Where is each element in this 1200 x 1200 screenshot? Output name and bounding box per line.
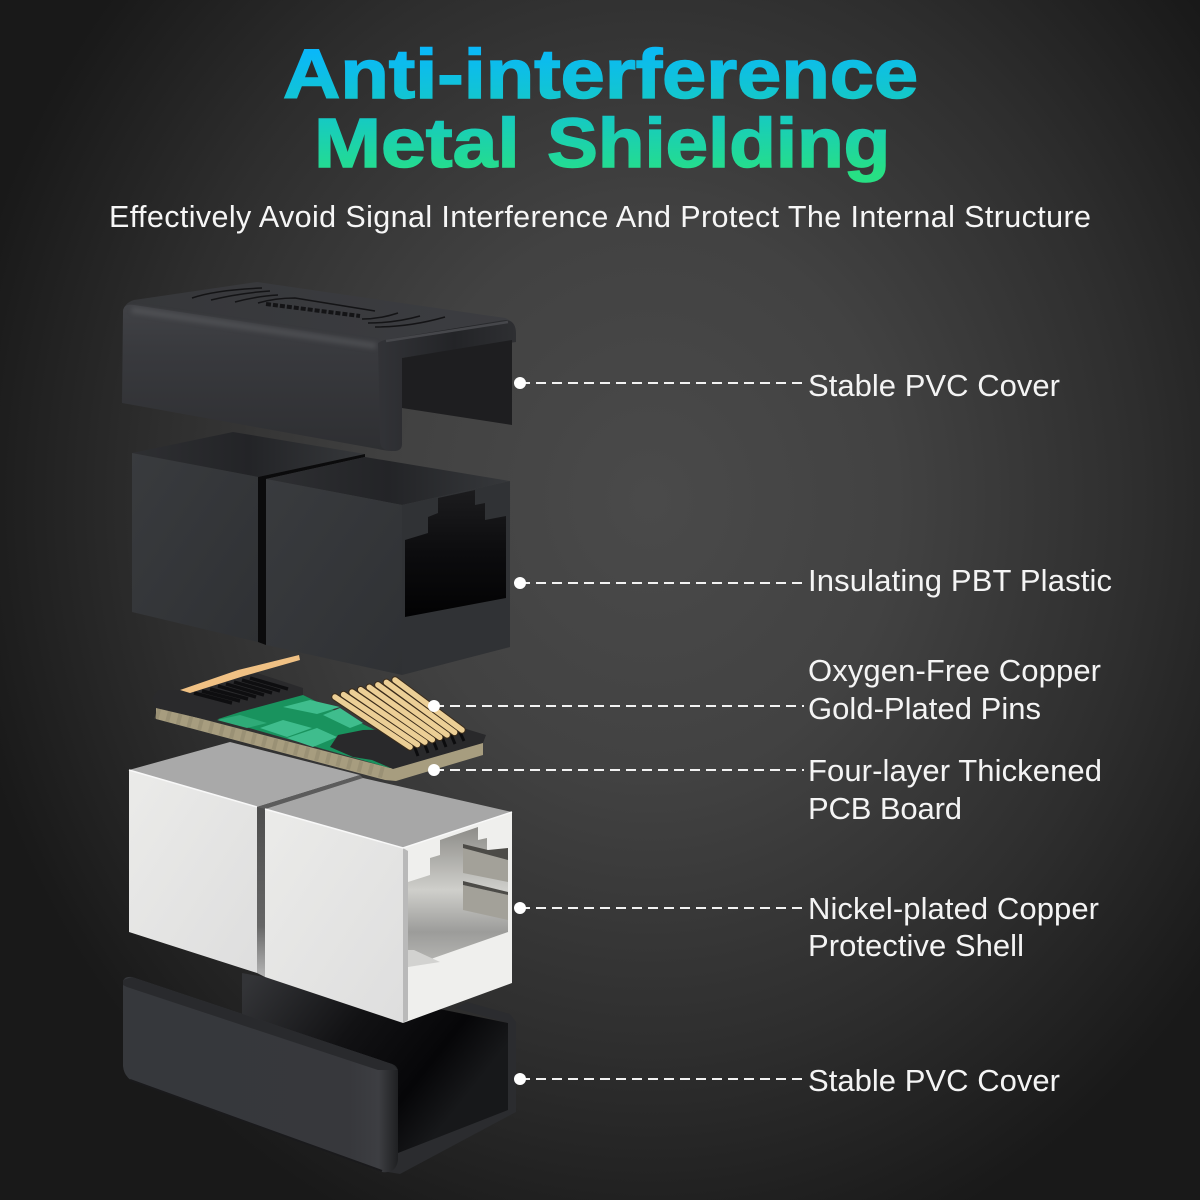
title: Anti-interference xyxy=(283,34,918,113)
callout: stable PVC cover (top): Stable PVC Cover xyxy=(808,368,1060,403)
part: top PVC cover xyxy=(122,282,516,451)
part: nickel-plated copper protective shell xyxy=(129,742,512,1023)
PCB green surface xyxy=(200,695,483,768)
title: Shielding xyxy=(547,104,890,182)
callout: protective shell xyxy=(514,891,1099,963)
callout: stable PVC cover (bottom) xyxy=(514,1063,1060,1098)
callout: gold-plated pins xyxy=(428,653,1101,726)
PCB edge xyxy=(156,707,483,781)
part: PCB board with gold-plated pins xyxy=(152,655,486,781)
title: Metal xyxy=(314,104,520,182)
callout: stable PVC cover (bottom): Stable PVC Cover xyxy=(808,1063,1060,1098)
part: insulating PBT plastic block xyxy=(132,432,510,675)
callout: stable PVC cover (top) xyxy=(514,368,1060,403)
callout: protective shell: Nickel-plated Copper xyxy=(808,891,1099,926)
callout: gold-plated pins: Gold-Plated Pins xyxy=(808,691,1041,726)
callout: protective shell: Protective Shell xyxy=(808,928,1024,963)
callout: insulating PBT plastic xyxy=(514,563,1112,598)
right connector xyxy=(330,728,486,769)
right gold pins xyxy=(335,680,462,747)
left connector and pins xyxy=(152,655,303,721)
title xyxy=(283,34,918,182)
PBT socket opening xyxy=(405,490,506,617)
callout: PCB board: Four-layer Thickened xyxy=(808,753,1102,788)
subtitle: Effectively Avoid Signal Interference And Protect The Internal Structure xyxy=(109,200,1091,234)
callout: insulating PBT plastic: Insulating PBT Plastic xyxy=(808,563,1112,598)
shell socket opening xyxy=(408,827,508,967)
callout: gold-plated pins: Oxygen-Free Copper xyxy=(808,653,1101,688)
callout: PCB board xyxy=(428,753,1102,826)
part: bottom PVC cover xyxy=(123,973,516,1174)
callout: PCB board: PCB Board xyxy=(808,791,962,826)
cover logo markings xyxy=(192,288,445,327)
